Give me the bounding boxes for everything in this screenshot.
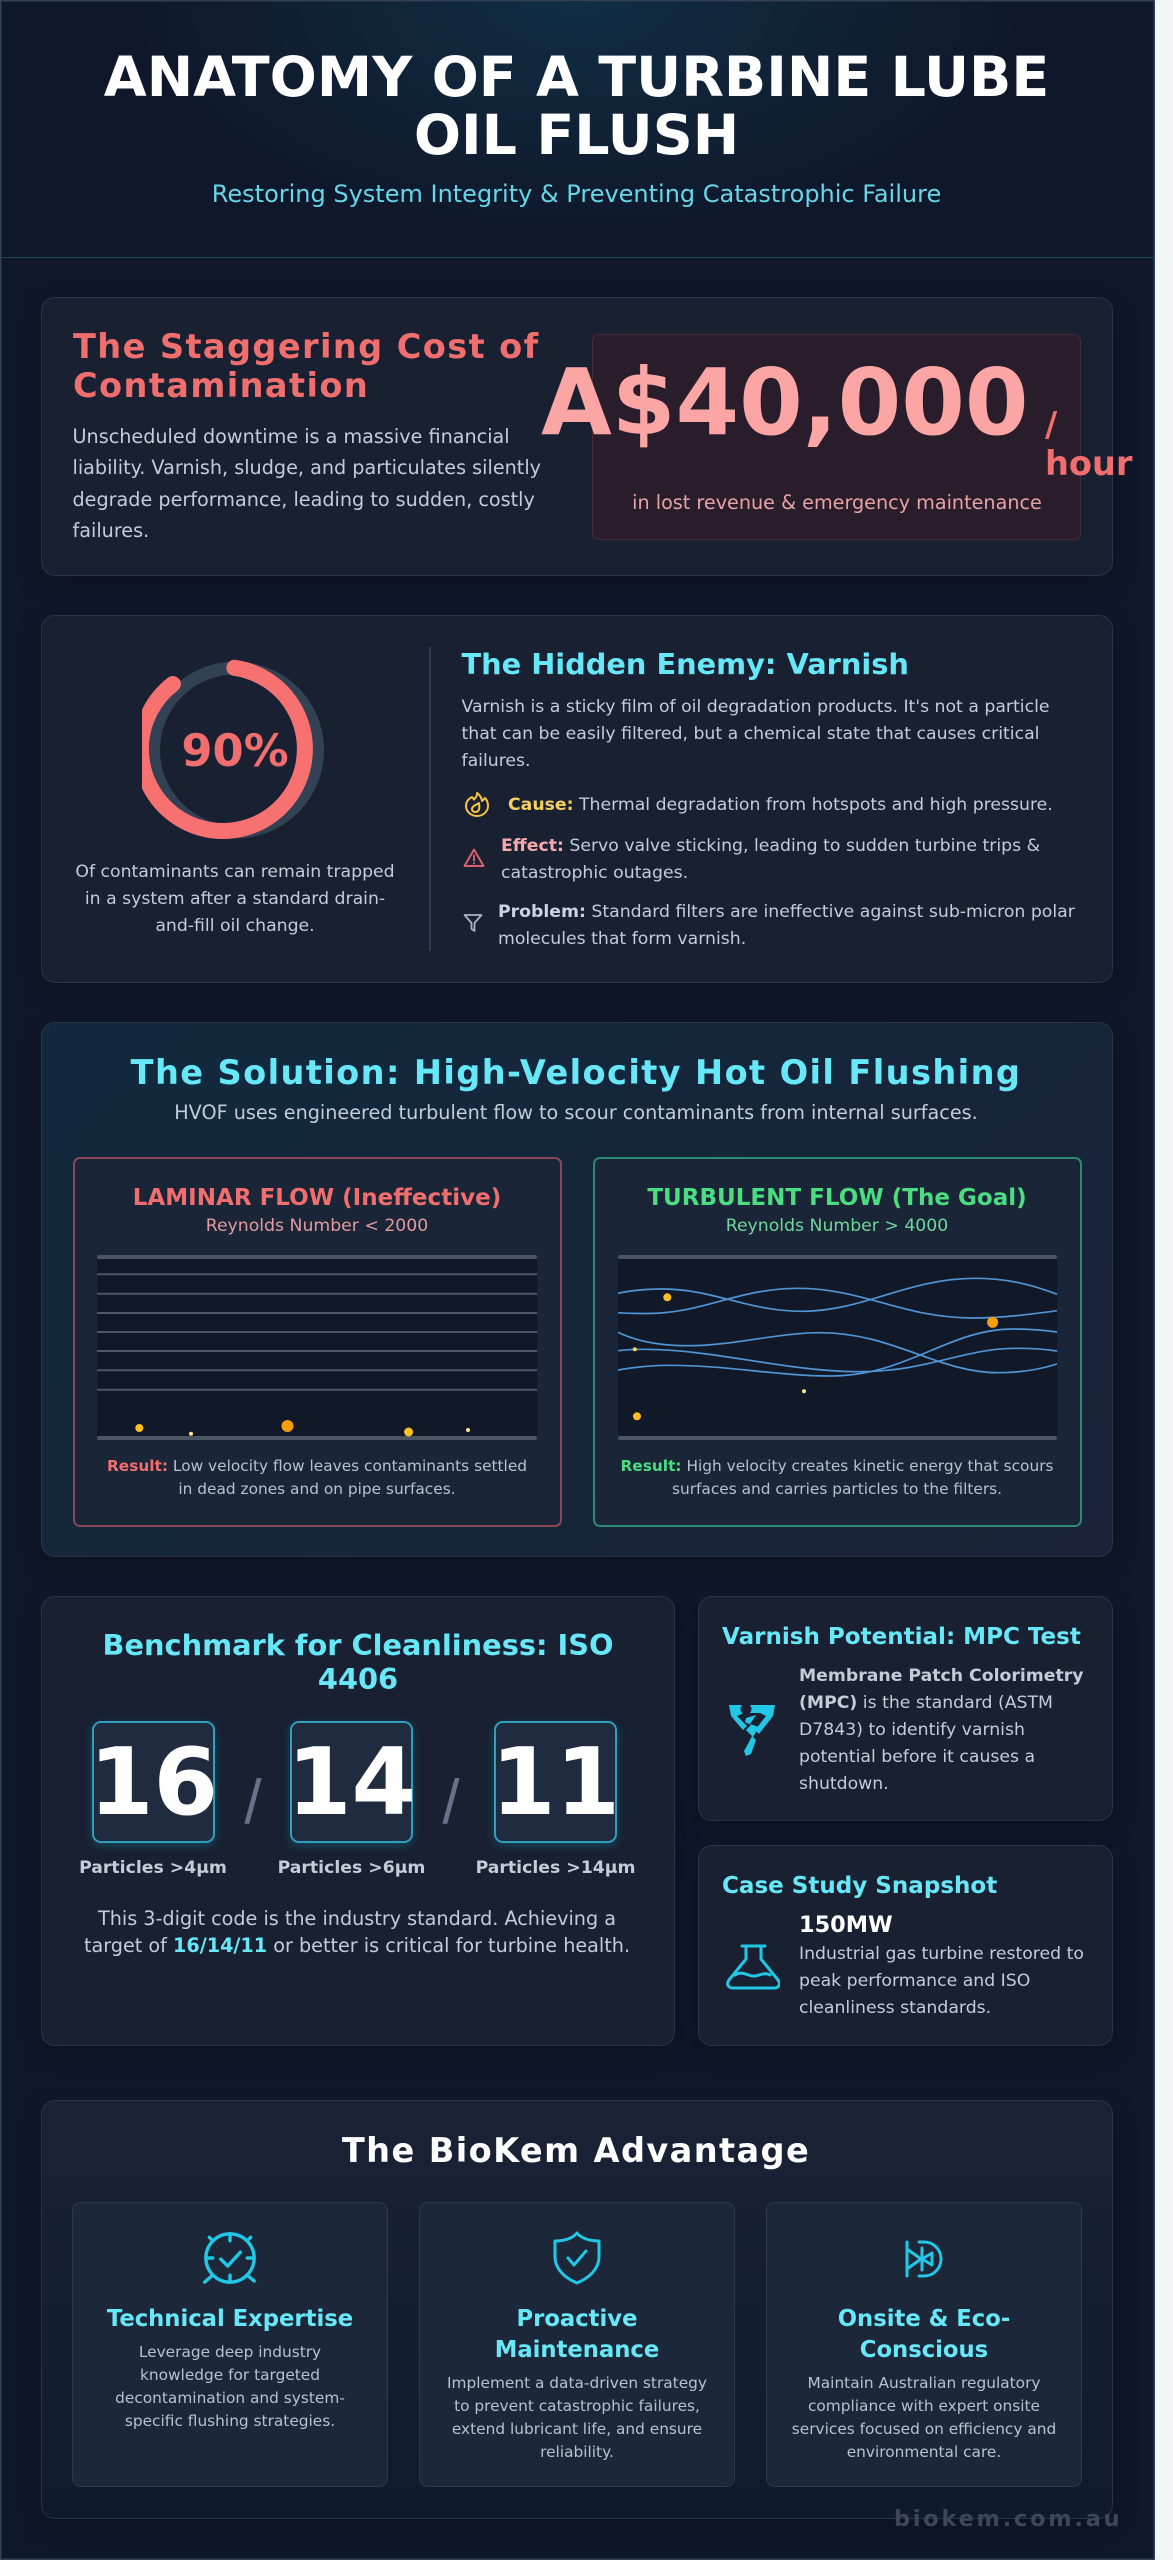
text: mpc description: shutdown. [799, 1774, 889, 1794]
icon: gear check [202, 2232, 256, 2284]
text: varnish description: failures. [462, 751, 531, 771]
turbulent result: surfaces and carries particles to the filters. [672, 1480, 1002, 1498]
card: technical expertise [72, 2202, 388, 2487]
big number: A$40,000 [541, 349, 1029, 456]
text: downtime description: degrade performance, leading to sudden, costly [72, 488, 535, 511]
text: mpc description: Membrane Patch Colorimetry [799, 1666, 1084, 1686]
donut chart: 90 percent [142, 660, 324, 839]
separator slash: / [244, 1768, 262, 1837]
item: problem: molecules that form varnish. [498, 929, 746, 949]
icon: flame [465, 792, 489, 817]
laminar heading: LAMINAR FLOW (Ineffective) [133, 1184, 501, 1210]
card: onsite and eco-conscious [766, 2202, 1082, 2487]
item: problem: Problem: Standard filters are ineffective against sub-micron polar [498, 902, 1075, 922]
label: particles 4um: Particles >4µm [79, 1858, 227, 1878]
per hour unit: / [1045, 405, 1057, 444]
card text: extend lubricant life, and ensure [452, 2420, 702, 2438]
turbulent heading: TURBULENT FLOW (The Goal) [647, 1184, 1027, 1210]
text: mpc description: potential before it causes a [799, 1747, 1035, 1767]
panel: biokem advantage [41, 2100, 1113, 2519]
icon: shield check [554, 2231, 600, 2284]
panel: iso 4406 benchmark [41, 1596, 675, 2046]
donut caption: in a system after a standard drain- [85, 889, 385, 909]
text: downtime description: failures. [72, 519, 149, 542]
card text: to prevent catastrophic failures, [454, 2396, 700, 2414]
item: effect: catastrophic outages. [501, 863, 688, 883]
heading: hidden enemy: The Hidden Enemy: Varnish [462, 647, 909, 681]
card title [838, 2306, 1010, 2362]
text: iso explanation: target of 16/14/11 or better is critical for turbine health. [84, 1934, 630, 1957]
card title: Conscious [860, 2336, 988, 2362]
card text: services focused on efficiency and [792, 2420, 1056, 2438]
card text: Implement a data-driven strategy [447, 2374, 707, 2392]
per hour unit [1045, 405, 1132, 483]
callout caption: in lost revenue & emergency maintenance [632, 491, 1042, 514]
text: varnish description: that can be easily filtered, but a chemical state that causes critical [462, 724, 1039, 744]
panel: turbulent flow [593, 1157, 1082, 1527]
text: mpc description: (MPC) is the standard (ASTM [799, 1693, 1053, 1713]
card text: decontamination and system- [115, 2389, 345, 2407]
heading: benchmark: 4406 [318, 1662, 398, 1696]
heading: staggering cost: Contamination [73, 366, 369, 404]
card text: compliance with expert onsite [808, 2396, 1040, 2414]
heading: staggering cost: The Staggering Cost of [73, 327, 540, 366]
laminar result [107, 1457, 527, 1498]
panel: laminar flow [73, 1157, 562, 1527]
card title: Proactive [517, 2306, 637, 2332]
heading: staggering cost [73, 327, 540, 404]
code: 14: 14 [287, 1728, 416, 1836]
label: particles 14um: Particles >14µm [476, 1858, 635, 1878]
per hour unit: hour [1045, 444, 1132, 483]
heading: case study: Case Study Snapshot [722, 1873, 997, 1899]
icon: warning triangle [464, 848, 484, 867]
stat: 150MW: 150MW [799, 1912, 893, 1938]
code: 16: 16 [89, 1728, 218, 1836]
icon: onsite eco [905, 2240, 942, 2278]
separator slash: / [442, 1768, 460, 1837]
laminar result: Result: Low velocity flow leaves contaminants settled [107, 1457, 527, 1475]
item: problem [498, 902, 1075, 949]
header [2, 2, 1154, 258]
panel: case study [698, 1845, 1113, 2046]
card title: Technical Expertise [107, 2306, 353, 2332]
subtitle: hvof: HVOF uses engineered turbulent flow to scour contaminants from internal surfaces. [174, 1101, 978, 1124]
icon: filter with drop [729, 1705, 775, 1756]
text: case description: Industrial gas turbine restored to [799, 1944, 1084, 1964]
title [104, 44, 1049, 168]
donut caption: and-fill oil change. [155, 916, 315, 936]
heading: solution: The Solution: High-Velocity Hot Oil Flushing [131, 1053, 1021, 1092]
text: mpc description: D7843) to identify varnish [799, 1720, 1025, 1740]
card text [115, 2343, 345, 2430]
card text: knowledge for targeted [140, 2366, 320, 2384]
diagram: laminar pipe [97, 1255, 537, 1440]
item: effect [501, 836, 1040, 883]
heading: advantage: The BioKem Advantage [342, 2131, 810, 2170]
card title: Maintenance [495, 2336, 659, 2362]
heading: mpc: Varnish Potential: MPC Test [722, 1624, 1081, 1650]
donut caption: Of contaminants can remain trapped [75, 862, 395, 882]
title: ANATOMY OF A TURBINE LUBE [104, 44, 1049, 110]
card title [495, 2306, 659, 2362]
turbulent reynolds number: Reynolds Number > 4000 [726, 1216, 948, 1236]
turbulent result: Result: High velocity creates kinetic energy that scours [620, 1457, 1054, 1475]
text: case description: cleanliness standards. [799, 1998, 991, 2018]
callout: hourly cost [592, 334, 1081, 540]
heading: benchmark [103, 1628, 613, 1696]
text: case description [799, 1944, 1084, 2018]
text: mpc description [799, 1666, 1084, 1794]
text: iso explanation: This 3-digit code is the industry standard. Achieving a [98, 1907, 616, 1930]
card: proactive maintenance [419, 2202, 735, 2487]
donut caption [75, 862, 395, 936]
card text: Leverage deep industry [139, 2343, 321, 2361]
heading: benchmark: Benchmark for Cleanliness: ISO [103, 1628, 613, 1662]
item: effect: Effect: Servo valve sticking, leading to sudden turbine trips & [501, 836, 1040, 856]
panel: hidden enemy varnish [41, 615, 1113, 983]
text: case description: peak performance and ISO [799, 1971, 1030, 1991]
card title: Onsite & Eco- [838, 2306, 1010, 2332]
footer: website: biokem.com.au [894, 2506, 1122, 2532]
laminar reynolds number: Reynolds Number < 2000 [206, 1216, 428, 1236]
text: varnish description: Varnish is a sticky film of oil degradation products. It's not a particle [462, 697, 1050, 717]
donut chart: 90 percent: 90% [181, 724, 289, 777]
card text: Maintain Australian regulatory [808, 2374, 1040, 2392]
card text: specific flushing strategies. [125, 2412, 335, 2430]
text: varnish description [462, 697, 1050, 771]
icon: filter funnel [464, 914, 482, 932]
text: iso explanation [84, 1907, 630, 1957]
card text: environmental care. [847, 2442, 1001, 2460]
title: OIL FLUSH [414, 102, 739, 168]
laminar result: in dead zones and on pipe surfaces. [178, 1480, 456, 1498]
card text: reliability. [540, 2442, 614, 2460]
panel: mpc test [698, 1596, 1113, 1821]
card text [792, 2374, 1056, 2460]
card text [447, 2374, 707, 2460]
panel: solution high-velocity hot oil flushing [41, 1022, 1113, 1557]
text: downtime description: Unscheduled downtime is a massive financial [72, 425, 510, 448]
diagram: turbulent pipe [618, 1255, 1057, 1440]
text: downtime description [72, 425, 541, 542]
text: downtime description: liability. Varnish, sludge, and particulates silently [72, 456, 541, 479]
turbulent result [620, 1457, 1054, 1498]
iso code boxes [79, 1720, 635, 1878]
subtitle: Restoring System Integrity & Preventing Catastrophic Failure [212, 180, 941, 208]
icon: flask [726, 1944, 780, 1990]
item: cause: Cause: Thermal degradation from hotspots and high pressure. [508, 795, 1053, 815]
code: 11: 11 [491, 1728, 620, 1836]
label: particles 6um: Particles >6µm [278, 1858, 425, 1878]
panel: cost of contamination [41, 297, 1113, 576]
